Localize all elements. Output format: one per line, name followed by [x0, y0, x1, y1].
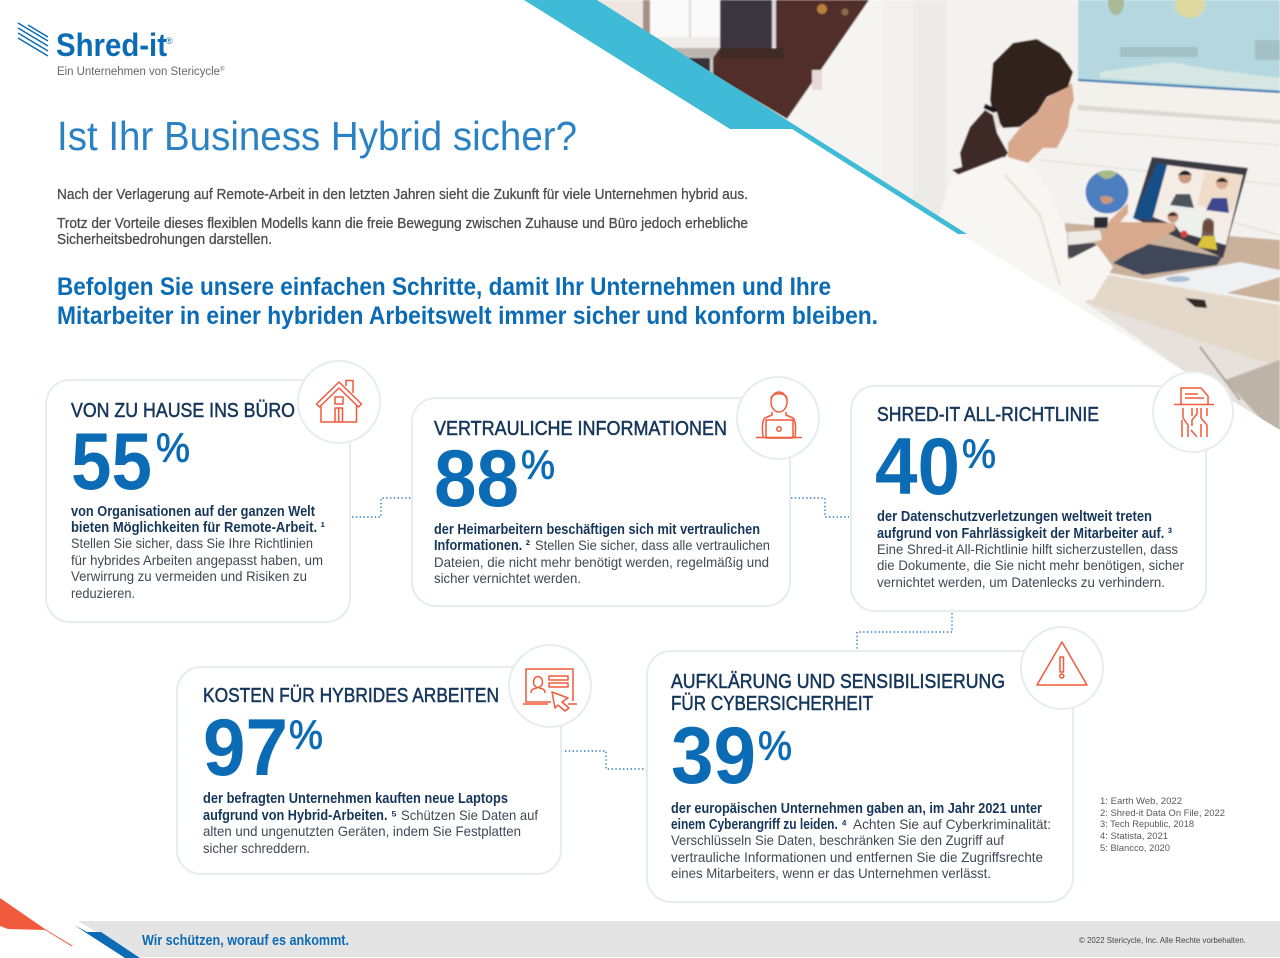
- intro text: [57, 187, 748, 248]
- body text: Stellen Sie sicher, dass alle vertraulichen: [535, 537, 770, 553]
- icon: house: [316, 380, 362, 422]
- body text: sicher vernichtet werden.: [434, 570, 581, 586]
- icon: shredder: [1174, 388, 1214, 437]
- body text: sicher schreddern.: [203, 840, 310, 856]
- icon: warning triangle: [1037, 642, 1087, 685]
- intro text: Sicherheitsbedrohungen darstellen.: [57, 232, 272, 248]
- subheading: Befolgen Sie unsere einfachen Schritte, damit Ihr Unternehmen und Ihre: [57, 273, 831, 301]
- panel: Aufklärung und Sensibilisierung: [647, 627, 1103, 902]
- statistic 40%: %: [962, 431, 996, 477]
- statistic 88%: %: [521, 442, 555, 488]
- subheading: Mitarbeiter in einer hybriden Arbeitswelt immer sicher und konform bleiben.: [57, 302, 878, 330]
- body text: [877, 509, 1184, 590]
- body text: die Dokumente, die Sie nicht mehr benötigen, sicher: [877, 557, 1184, 573]
- body text: reduzieren.: [71, 585, 135, 601]
- body text: Stellen Sie sicher, dass Sie Ihre Richtlinien: [71, 535, 313, 551]
- heading: KOSTEN FÜR HYBRIDES ARBEITEN: [203, 685, 499, 707]
- statistic 55%: 55: [71, 417, 152, 507]
- body text: der Datenschutzverletzungen weltweit treten: [877, 509, 1152, 525]
- statistic 97%: 97: [203, 703, 288, 793]
- body text: der befragten Unternehmen kauften neue Laptops: [203, 791, 508, 807]
- footnotes: 5: Blancco, 2020: [1100, 843, 1170, 854]
- body text: [71, 504, 325, 601]
- footnotes: 3: Tech Republic, 2018: [1100, 819, 1194, 830]
- statistic 55%: %: [156, 425, 190, 471]
- footnotes: 4: Statista, 2021: [1100, 831, 1168, 842]
- icon: online profile with cursor: [523, 669, 577, 711]
- tagline: Wir schützen, worauf es ankommt.: [142, 933, 349, 949]
- statistic 88%: 88: [434, 434, 519, 524]
- cyan diagonal band: [524, 0, 967, 234]
- heading: VERTRAULICHE INFORMATIONEN: [434, 418, 727, 440]
- heading: VON ZU HAUSE INS BÜRO: [71, 400, 295, 422]
- statistic 39%: 39: [671, 711, 756, 801]
- statistic 39%: %: [758, 723, 792, 769]
- body text: eines Mitarbeiters, wenn er das Unternehmen verlässt.: [671, 865, 991, 881]
- statistic 40%: 40: [875, 422, 960, 512]
- body text: Verschlüsseln Sie Daten, beschränken Sie den Zugriff auf: [671, 832, 1004, 848]
- blue stripe: [74, 925, 140, 958]
- body text: Verwirrung zu vermeiden und Risiken zu: [71, 568, 307, 584]
- body text: Dateien, die nicht mehr benötigt werden, regelmäßig und: [434, 554, 769, 570]
- footer bar: [0, 898, 1280, 958]
- logo stripes: [18, 23, 48, 56]
- dotted connectors between cards: [352, 498, 952, 769]
- body text: [203, 791, 538, 856]
- body text: [434, 522, 770, 586]
- body text: einem Cyberangriff zu leiden. ⁴: [671, 817, 847, 833]
- footnotes: 2: Shred-it Data On File, 2022: [1100, 808, 1225, 819]
- body text: für hybrides Arbeiten angepasst haben, um: [71, 552, 323, 568]
- logo: Shred-it: Shred-it: [56, 27, 167, 63]
- orange stripe: [0, 898, 73, 946]
- footnotes: [1100, 796, 1225, 854]
- logo: Shred-it: ®: [220, 66, 225, 73]
- body text: [671, 801, 1051, 881]
- body text: von Organisationen auf der ganzen Welt: [71, 504, 315, 520]
- body text: aufgrund von Hybrid-Arbeiten. ⁵: [203, 808, 397, 824]
- body text: Eine Shred-it All-Richtlinie hilft sicherzustellen, dass: [877, 541, 1178, 557]
- panel: vertrauliche Informationen: [412, 377, 819, 606]
- heading: AUFKLÄRUNG UND SENSIBILISIERUNG: [671, 671, 1005, 693]
- body text: Schützen Sie Daten auf: [401, 807, 538, 823]
- logo: Shred-it: [18, 23, 225, 78]
- body text: der europäischen Unternehmen gaben an, im Jahr 2021 unter: [671, 801, 1042, 817]
- icon: person at laptop: [756, 392, 802, 438]
- heading: FÜR CYBERSICHERHEIT: [671, 693, 873, 715]
- panel: Shred-it All-Richtlinie: [851, 372, 1233, 611]
- heading: SHRED-IT ALL-RICHTLINIE: [877, 404, 1099, 426]
- body text: bieten Möglichkeiten für Remote-Arbeit. ¹: [71, 520, 325, 536]
- heading: [671, 671, 1005, 715]
- logo: Shred-it: Ein Unternehmen von Stericycle: [57, 66, 220, 78]
- subheading: [57, 273, 878, 330]
- panel: Kosten für hybrides Arbeiten: [177, 645, 591, 874]
- body text: Achten Sie auf Cyberkriminalität:: [853, 816, 1051, 832]
- title: Ist Ihr Business Hybrid sicher?: [57, 113, 577, 159]
- intro text: Nach der Verlagerung auf Remote-Arbeit in den letzten Jahren sieht die Zukunft für viele Unternehmen hybrid aus.: [57, 187, 748, 203]
- body text: alten und ungenutzten Geräten, indem Sie Festplatten: [203, 823, 521, 839]
- body text: vertrauliche Informationen und entfernen Sie die Zugriffsrechte: [671, 849, 1043, 865]
- statistic 97%: %: [289, 712, 323, 758]
- body text: aufgrund von Fahrlässigkeit der Mitarbeiter auf. ³: [877, 526, 1172, 542]
- body text: der Heimarbeitern beschäftigen sich mit vertraulichen: [434, 522, 760, 538]
- intro text: Trotz der Vorteile dieses flexiblen Modells kann die freie Bewegung zwischen Zuhause und Büro jedoch erhebliche: [57, 216, 748, 232]
- photo: woman on a video call at a desk: [590, 0, 1280, 440]
- body text: Informationen. ²: [434, 538, 530, 554]
- panel: von zu Hause ins Büro: [46, 361, 380, 622]
- footnotes: 1: Earth Web, 2022: [1100, 796, 1182, 807]
- body text: vernichtet werden, um Datenlecks zu verhindern.: [877, 574, 1165, 590]
- copyright: © 2022 Stericycle, Inc. Alle Rechte vorbehalten.: [1079, 936, 1246, 945]
- logo: Shred-it: ®: [166, 36, 173, 46]
